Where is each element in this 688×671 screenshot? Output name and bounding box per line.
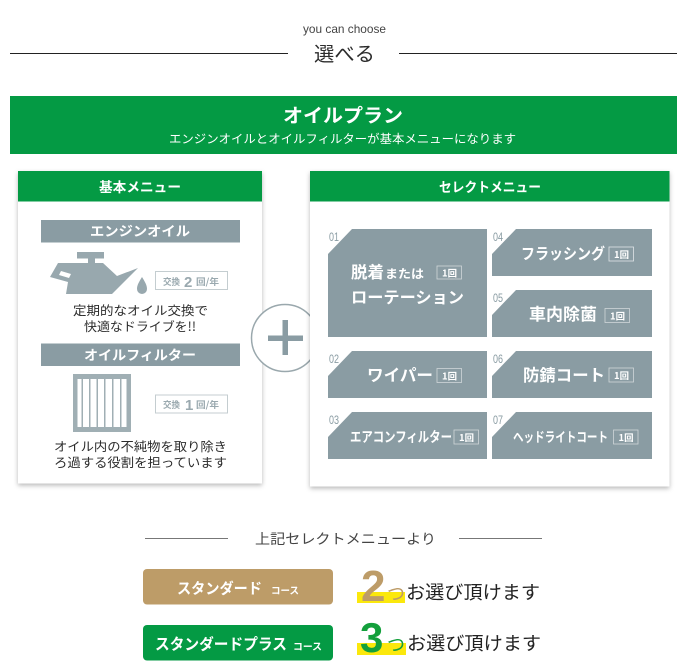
tile 01: rotation: ローテーション: [351, 284, 464, 308]
choice: pick 2: 2: [361, 562, 385, 611]
tile 03: air conditioner filter: エアコンフィルター: [350, 427, 452, 447]
tile 05: cabin sterilization: [492, 290, 652, 337]
choice: pick 2: お選び頂けます: [406, 579, 540, 605]
engine oil description: [73, 300, 208, 335]
tile 07: headlight coat: 1回: [618, 431, 634, 444]
tile 04: flushing: フラッシング: [521, 242, 605, 264]
tile 01: rotation: 01: [329, 230, 339, 244]
replacement badge: 1 per year: 1: [185, 397, 193, 414]
tile 05: cabin sterilization: 車内除菌: [529, 301, 597, 325]
banner: oil plan: オイルプラン: [283, 101, 403, 128]
select menu header: セレクトメニュー: [439, 176, 541, 196]
choice: pick 3: お選び頂けます: [407, 630, 541, 656]
section heading: 選べる: [314, 38, 375, 67]
engine oil description: 定期的なオイル交換で: [73, 300, 208, 319]
tile 06: rust-proof coat: 1回: [614, 369, 629, 382]
select menu header: [310, 171, 670, 202]
banner: oil plan: [10, 96, 677, 154]
course: standard plus: [143, 625, 333, 660]
replacement badge: 1 per year: 交換: [163, 398, 180, 411]
tile 05: cabin sterilization: 05: [493, 291, 503, 305]
icon: oil can: [50, 252, 147, 294]
basic menu header: 基本メニュー: [99, 176, 181, 196]
engine oil description: 快適なドライブを!!: [84, 316, 196, 335]
tile 03: air conditioner filter: [328, 412, 487, 459]
section heading: [10, 22, 677, 67]
course: standard: [143, 569, 333, 604]
replacement badge: 2 per year: 回/年: [196, 275, 219, 288]
tile 03: air conditioner filter: 1回: [459, 431, 474, 444]
tile 02: wiper: 02: [329, 352, 339, 366]
tile 01: rotation: 1回: [442, 266, 457, 280]
tile 07: headlight coat: 07: [493, 413, 503, 427]
tile 02: wiper: ワイパー: [367, 362, 433, 386]
course: standard: スタンダード: [177, 578, 262, 598]
tile 06: rust-proof coat: [492, 351, 652, 398]
tile 01: rotation: [328, 229, 487, 337]
tile 07: headlight coat: [492, 412, 652, 459]
tile 05: cabin sterilization: 1回: [610, 310, 625, 322]
tile 07: headlight coat: ヘッドライトコート: [513, 426, 608, 446]
icon: plus: [252, 304, 318, 372]
choice: pick 3: [357, 614, 541, 661]
choice: pick 2: [357, 562, 540, 611]
engine oil label: [41, 220, 240, 242]
tile 04: flushing: 04: [493, 230, 503, 244]
panel: basic menu: [18, 171, 262, 484]
basic menu header: [18, 171, 262, 202]
subheading: from the select menu: 上記セレクトメニューより: [255, 529, 436, 549]
oil filter description: [54, 436, 227, 471]
tile 02: wiper: 1回: [442, 370, 457, 382]
tile 02: wiper: [328, 351, 487, 398]
tile 04: flushing: 1回: [614, 248, 629, 261]
banner: oil plan: エンジンオイルとオイルフィルターが基本メニューになります: [169, 130, 516, 147]
course: standard: コース: [271, 583, 299, 597]
icon: oil filter: [73, 374, 131, 432]
tile 01: rotation: または: [385, 265, 424, 282]
tile 06: rust-proof coat: 防錆コート: [523, 362, 605, 386]
choice: pick 2: つ: [387, 580, 405, 606]
engine oil label: エンジンオイル: [90, 220, 191, 240]
tile 01: rotation: 脱着: [351, 259, 384, 283]
tile 04: flushing: [492, 229, 652, 276]
section heading: you can choose: [303, 22, 386, 36]
tile 06: rust-proof coat: 06: [493, 352, 503, 366]
replacement badge: 1 per year: [156, 395, 228, 414]
panel: select menu: [310, 171, 670, 486]
tile 03: air conditioner filter: 03: [329, 413, 339, 427]
course: standard plus: コース: [293, 639, 322, 653]
choice: pick 3: 3: [360, 614, 383, 661]
choice: pick 3: つ: [387, 631, 405, 657]
replacement badge: 2 per year: 交換: [163, 275, 180, 288]
oil filter description: ろ過する役割を担っています: [54, 452, 227, 471]
replacement badge: 2 per year: [156, 272, 228, 291]
oil filter label: オイルフィルター: [84, 344, 196, 364]
course: standard plus: スタンダードプラス: [155, 632, 287, 654]
replacement badge: 1 per year: 回/年: [196, 398, 219, 411]
oil filter label: [41, 344, 240, 366]
replacement badge: 2 per year: 2: [184, 274, 192, 291]
oil filter description: オイル内の不純物を取り除き: [54, 436, 227, 455]
